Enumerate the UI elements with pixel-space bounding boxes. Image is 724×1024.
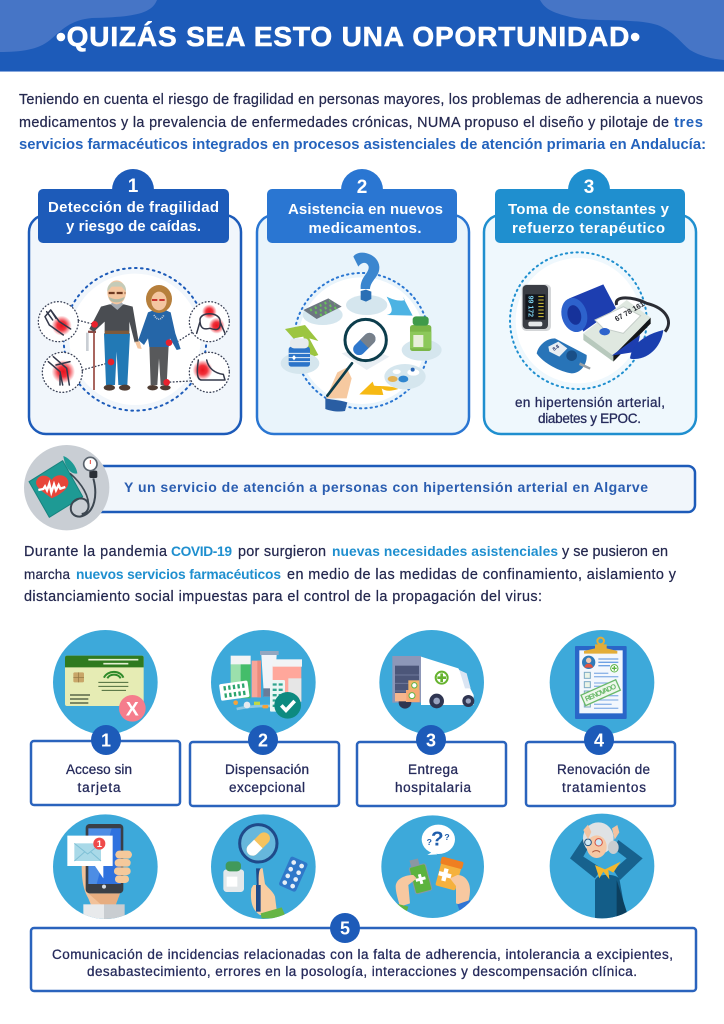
paragraph: pandemic: en medio de las medidas de confinamiento, aislamiento y <box>287 567 677 583</box>
intro paragraph <box>19 92 706 153</box>
number 1: 1 <box>101 730 111 750</box>
glucometer: 8.8 <box>552 344 561 353</box>
heading: service 1 <box>38 189 229 243</box>
woman <box>138 285 181 390</box>
intro paragraph: servicios farmacéuticos integrados en procesos asistenciales de atención primaria en Andalucía: <box>19 137 706 153</box>
green bottle <box>402 316 442 361</box>
icon: phone message: 1 <box>97 839 102 849</box>
paragraph: pandemic: distanciamiento social impuestas para el control de la propagación del virus: <box>24 589 542 605</box>
number 3: 3 <box>426 730 436 750</box>
heading: service 1: Detección de fragilidad <box>48 199 219 216</box>
left bottle and arrow <box>281 325 319 374</box>
header banner <box>0 0 724 72</box>
icon: sphygmomanometer <box>24 445 109 530</box>
icon: delivery van <box>379 630 484 735</box>
icon: prescription clipboard <box>550 630 654 735</box>
callout: Algarve service: Y un servicio de atención a personas con hipertensión arterial en Algarve <box>124 479 648 495</box>
intro paragraph: tres <box>674 115 703 131</box>
heading: service 2: Asistencia en nuevos <box>288 201 443 218</box>
glucometer <box>537 338 591 373</box>
box 1: card-free access <box>31 725 180 805</box>
number 2 <box>248 725 278 755</box>
illustration: medicine cycle <box>281 253 442 412</box>
icon: confused medicine comparison: ? <box>444 832 450 842</box>
paragraph: pandemic <box>24 544 677 605</box>
box 3: hospital delivery: Entrega <box>408 762 458 777</box>
icon: worried older woman <box>550 814 654 920</box>
box 4: treatment renewal: tratamientos <box>562 780 646 795</box>
number 3 <box>416 725 446 755</box>
heading: service 3: refuerzo terapéutico <box>512 220 665 237</box>
heading: service 1: y riesgo de caídas. <box>66 218 201 235</box>
man <box>86 280 142 391</box>
panel: service 1 frailty <box>29 169 241 434</box>
caption: conditions: diabetes y EPOC. <box>538 411 641 426</box>
number 2: 2 <box>258 730 268 750</box>
box 2: exceptional dispensing: excepcional <box>229 780 305 795</box>
illustration: elderly couple and pain points <box>38 268 229 411</box>
heading: service 3 <box>495 189 685 243</box>
box 3: hospital delivery: hospitalaria <box>395 780 471 795</box>
pulse oximeter: 99 172 <box>527 296 534 317</box>
icon: confused medicine comparison: ? <box>427 837 432 847</box>
paragraph: pandemic: marcha <box>24 567 70 582</box>
box 3: hospital delivery <box>357 725 506 806</box>
icon: confused medicine comparison <box>381 815 484 918</box>
icon: prescription clipboard: RENOVADO <box>584 682 618 703</box>
number 1: 1 <box>128 176 139 197</box>
heading: service 2: medicamentos. <box>308 220 422 237</box>
paragraph: pandemic: nuevas necesidades asistenciales <box>332 544 558 559</box>
icon: exceptional dispensing <box>211 630 316 735</box>
magnifier and hand <box>325 319 389 412</box>
number 5: 5 <box>340 918 350 938</box>
paragraph: pandemic: COVID-19 <box>171 544 232 559</box>
blister pack <box>303 298 343 325</box>
paragraph: pandemic: Durante la pandemia <box>24 544 167 560</box>
number 4 <box>584 725 614 755</box>
box 1: card-free access: tarjeta <box>78 780 121 795</box>
illustration: measuring devices <box>510 252 669 389</box>
blood pressure monitor <box>583 299 663 362</box>
blood pressure monitor: 67 78 161 <box>613 299 646 323</box>
question mark on disc <box>346 253 387 315</box>
paragraph: pandemic: por surgieron <box>238 544 326 560</box>
panel: service 2 new medicines <box>257 169 469 434</box>
number 4: 4 <box>594 730 604 750</box>
cuff <box>558 284 669 335</box>
number 3: 3 <box>584 177 594 198</box>
paragraph: pandemic: y se pusieron en <box>562 544 668 560</box>
caption: conditions: en hipertensión arterial, <box>515 395 665 410</box>
pulse oximeter <box>522 284 551 331</box>
number 5 <box>330 913 360 943</box>
icon: health card <box>53 630 158 735</box>
icon: confused medicine comparison: ? <box>431 827 444 850</box>
heading: service 3: Toma de constantes y <box>508 201 670 218</box>
title: •QUIZÁS SEA ESTO UNA OPORTUNIDAD• <box>56 21 640 52</box>
icon: health card: X <box>126 699 139 720</box>
box 5: incident communication <box>31 913 696 991</box>
number 1 <box>91 725 121 755</box>
box 4: treatment renewal: Renovación de <box>557 762 650 777</box>
icon: phone message <box>53 814 158 921</box>
box 5: incident communication: desabastecimiento, errores en la posología, interacciones y descompensación clínica. <box>87 964 637 979</box>
box 2: exceptional dispensing: Dispensación <box>225 762 309 777</box>
heading: service 2 <box>267 189 457 243</box>
callout: Algarve service <box>24 445 695 530</box>
pill tray <box>384 364 426 389</box>
caption: conditions <box>515 395 665 426</box>
intro paragraph: Teniendo en cuenta el riesgo de fragilidad en personas mayores, los problemas de adherencia a nuevos <box>19 92 703 108</box>
box 4: treatment renewal <box>526 725 675 806</box>
number 2: 2 <box>357 177 367 198</box>
panel: service 3 vitals <box>484 169 696 434</box>
icon: magnifier over capsule <box>211 814 316 919</box>
box 1: card-free access: Acceso sin <box>66 762 132 777</box>
intro paragraph: medicamentos y la prevalencia de enfermedades crónicas, NUMA propuso el diseño y pilotaje de <box>19 115 669 131</box>
box 5: incident communication: Comunicación de incidencias relacionadas con la falta de adherencia, intolerancia a excipientes, <box>52 947 673 962</box>
paragraph: pandemic: nuevos servicios farmacéuticos <box>76 567 281 582</box>
box 2: exceptional dispensing <box>190 725 339 806</box>
